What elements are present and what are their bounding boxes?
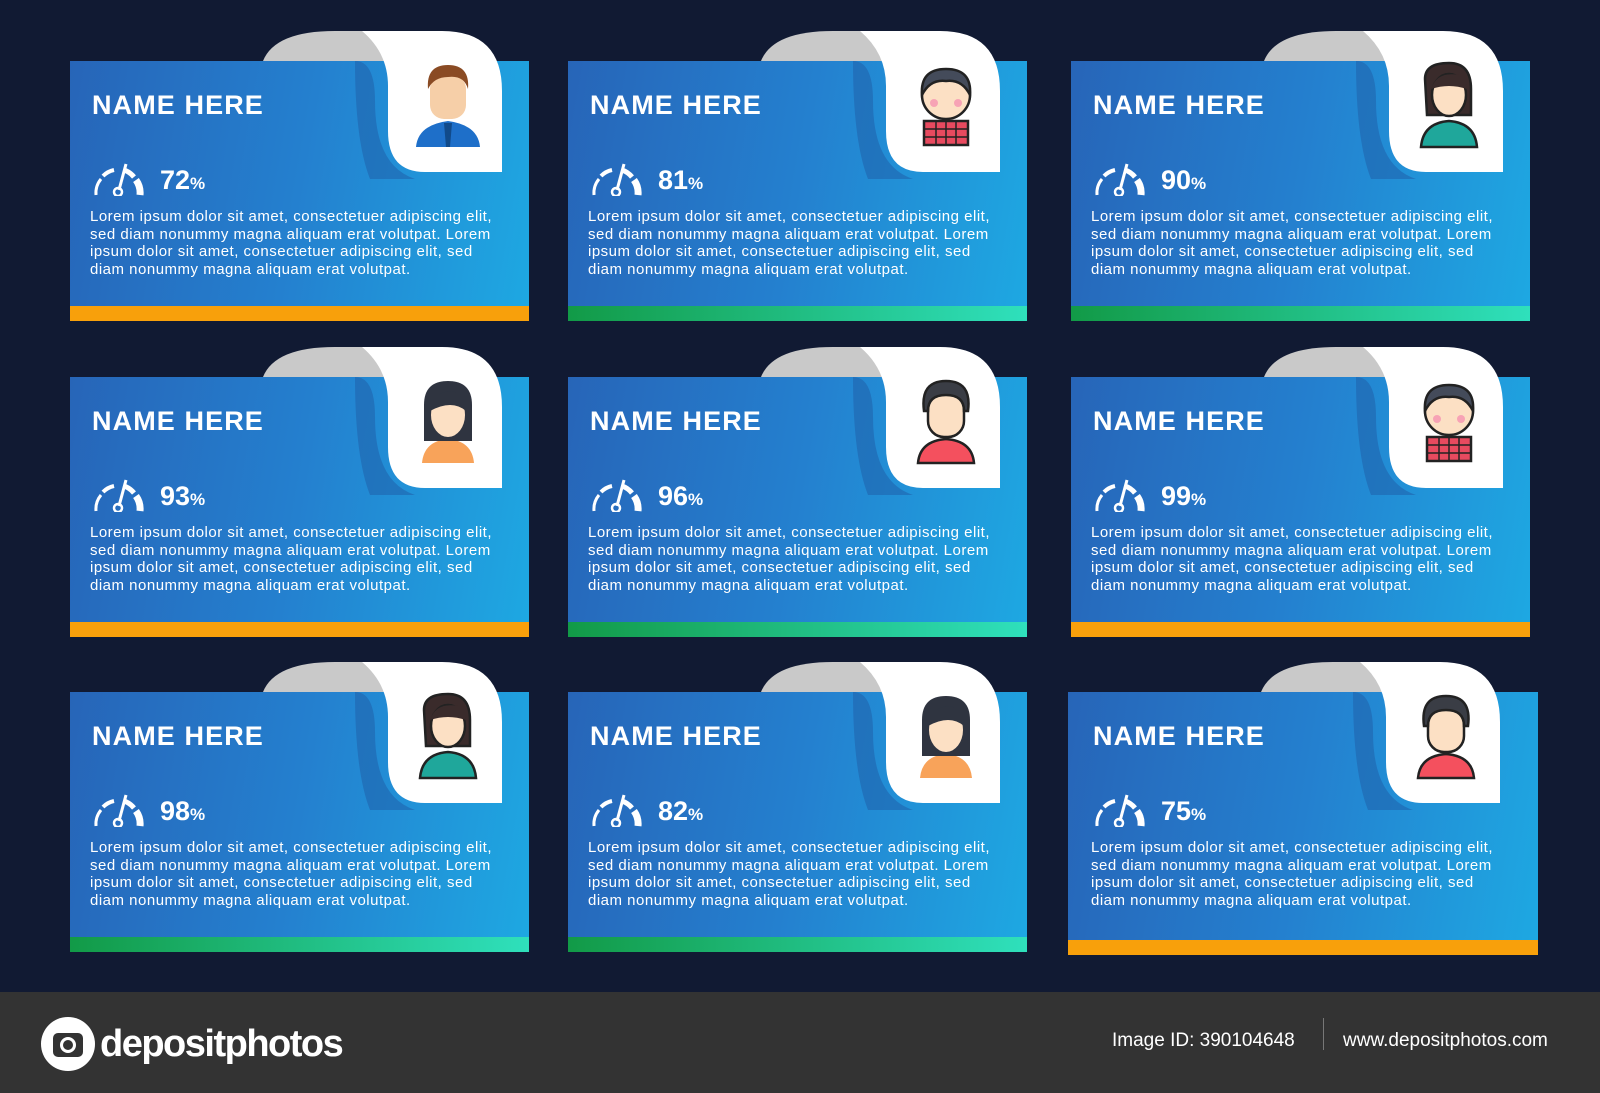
- icon: gauge: [592, 794, 642, 827]
- percentage: 82%: [658, 796, 703, 826]
- icon: man avatar red shirt: [916, 380, 976, 464]
- card body: [568, 377, 1027, 622]
- percentage: 81%: [658, 165, 703, 195]
- description: Lorem ipsum dolor sit amet, consectetuer adipiscing elit, sed diam nonummy magna aliquam erat volutpat. Lorem ipsum dolor sit amet, consectetuer adipiscing elit, sed diam nonummy magna aliquam erat volutpat.: [90, 839, 492, 909]
- description: Lorem ipsum dolor sit amet, consectetuer adipiscing elit, sed diam nonummy magna aliquam erat volutpat. Lorem ipsum dolor sit amet, consectetuer adipiscing elit, sed diam nonummy magna aliquam erat volutpat.: [1091, 839, 1493, 909]
- icon: gauge: [1093, 793, 1145, 827]
- description: Lorem ipsum dolor sit amet, consectetuer adipiscing elit, sed diam nonummy magna aliquam erat volutpat. Lorem ipsum dolor sit amet, consectetuer adipiscing elit, sed diam nonummy magna aliquam erat volutpat.: [588, 839, 990, 909]
- icon: man avatar: [416, 65, 480, 147]
- name: NAME HERE: [1093, 721, 1265, 751]
- percentage: 99%: [1161, 481, 1206, 511]
- bottom bar: [70, 937, 529, 952]
- name: NAME HERE: [1093, 90, 1265, 120]
- icon: gauge: [592, 164, 642, 196]
- card body: [1071, 377, 1530, 622]
- description: Lorem ipsum dolor sit amet, consectetuer adipiscing elit, sed diam nonummy magna aliquam erat volutpat. Lorem ipsum dolor sit amet, consectetuer adipiscing elit, sed diam nonummy magna aliquam erat volutpat.: [1091, 524, 1493, 594]
- website: www.depositphotos.com: [1343, 1030, 1548, 1051]
- card 8: [568, 662, 1027, 952]
- card body: [568, 61, 1027, 306]
- percentage: 72%: [160, 165, 205, 195]
- bottom bar: [1071, 622, 1530, 637]
- card body: [70, 692, 529, 937]
- avatar tab: [1068, 662, 1527, 812]
- card 6: [1071, 347, 1530, 637]
- icon: woman avatar: [422, 381, 474, 463]
- icon: woman avatar teal: [418, 692, 478, 780]
- icon: woman avatar: [920, 696, 972, 778]
- card 3: [1071, 31, 1530, 321]
- avatar tab: [1264, 347, 1503, 495]
- name: NAME HERE: [92, 406, 264, 436]
- bottom bar: [1068, 940, 1538, 955]
- avatar tab: [263, 31, 502, 179]
- card 2: [568, 31, 1027, 321]
- bottom bar: [70, 622, 529, 637]
- percentage: 75%: [1161, 796, 1206, 826]
- card body: [568, 692, 1027, 937]
- icon: gauge: [94, 164, 144, 196]
- icon: woman avatar: [1420, 62, 1478, 148]
- card body: [70, 377, 529, 622]
- description: Lorem ipsum dolor sit amet, consectetuer adipiscing elit, sed diam nonummy magna aliquam erat volutpat. Lorem ipsum dolor sit amet, consectetuer adipiscing elit, sed diam nonummy magna aliquam erat volutpat.: [588, 524, 990, 594]
- bottom bar: [568, 306, 1027, 321]
- percentage: 96%: [658, 481, 703, 511]
- icon: gauge: [1095, 164, 1145, 196]
- logo text: depositphotos: [100, 1022, 342, 1064]
- description: Lorem ipsum dolor sit amet, consectetuer adipiscing elit, sed diam nonummy magna aliquam erat volutpat. Lorem ipsum dolor sit amet, consectetuer adipiscing elit, sed diam nonummy magna aliquam erat volutpat.: [1091, 208, 1493, 278]
- avatar tab: [1264, 31, 1503, 179]
- icon: gauge: [1095, 480, 1145, 512]
- icon: gauge: [94, 480, 144, 512]
- footer: [0, 992, 1600, 1093]
- card 5: [568, 347, 1027, 637]
- card 1: [70, 31, 529, 321]
- card 4: [70, 347, 529, 637]
- logo: [40, 1016, 342, 1072]
- percentage: 93%: [160, 481, 205, 511]
- description: Lorem ipsum dolor sit amet, consectetuer adipiscing elit, sed diam nonummy magna aliquam erat volutpat. Lorem ipsum dolor sit amet, consectetuer adipiscing elit, sed diam nonummy magna aliquam erat volutpat.: [588, 208, 990, 278]
- avatar tab: [263, 662, 502, 810]
- percentage: 98%: [160, 796, 205, 826]
- name: NAME HERE: [1093, 406, 1265, 436]
- image id: Image ID: 390104648: [1112, 1030, 1295, 1051]
- card 9: [1068, 692, 1538, 952]
- avatar tab: [761, 31, 1000, 179]
- bottom bar: [568, 937, 1027, 952]
- name: NAME HERE: [590, 721, 762, 751]
- name: NAME HERE: [92, 90, 264, 120]
- card 7: [70, 662, 529, 952]
- avatar tab: [761, 347, 1000, 495]
- card body: [70, 61, 529, 306]
- description: Lorem ipsum dolor sit amet, consectetuer adipiscing elit, sed diam nonummy magna aliquam erat volutpat. Lorem ipsum dolor sit amet, consectetuer adipiscing elit, sed diam nonummy magna aliquam erat volutpat.: [90, 524, 492, 594]
- bottom bar: [70, 306, 529, 321]
- percentage: 90%: [1161, 165, 1206, 195]
- name: NAME HERE: [92, 721, 264, 751]
- bottom bar: [568, 622, 1027, 637]
- name: NAME HERE: [590, 406, 762, 436]
- name: NAME HERE: [590, 90, 762, 120]
- icon: gauge: [94, 794, 144, 827]
- card body: [1071, 61, 1530, 306]
- avatar tab: [761, 662, 1000, 810]
- avatar tab: [263, 347, 502, 495]
- description: Lorem ipsum dolor sit amet, consectetuer adipiscing elit, sed diam nonummy magna aliquam erat volutpat. Lorem ipsum dolor sit amet, consectetuer adipiscing elit, sed diam nonummy magna aliquam erat volutpat.: [90, 208, 492, 278]
- icon: gauge: [592, 480, 642, 512]
- icon: man avatar red shirt: [1406, 690, 1486, 780]
- card body: [1068, 692, 1538, 940]
- icon: camera logo: [40, 1016, 96, 1072]
- icon: boy avatar: [920, 68, 972, 146]
- bottom bar: [1071, 306, 1530, 321]
- icon: boy avatar: [1424, 384, 1474, 462]
